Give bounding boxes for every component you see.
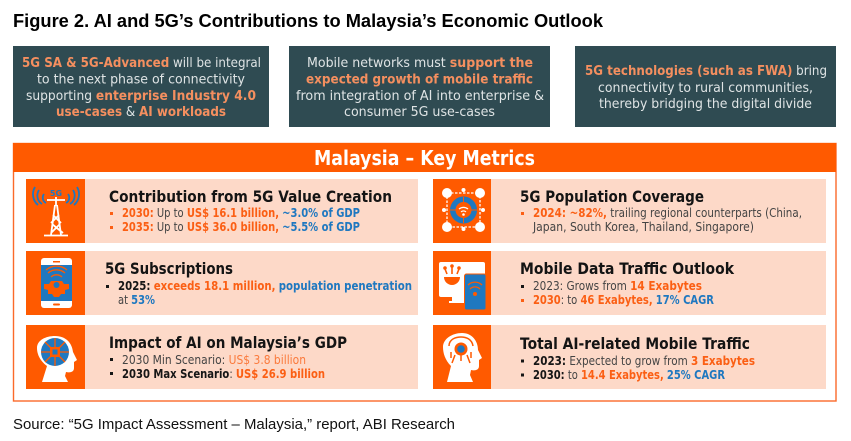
metric lines: 2023: Expected to grow from 3 Exabytes [533, 353, 755, 368]
card heading: Mobile Data Traffic Outlook [520, 259, 734, 278]
card: 5G subscriptions [26, 251, 418, 315]
metric lines [521, 353, 755, 382]
panel heading: Malaysia – Key Metrics [314, 146, 535, 170]
card: mobile data traffic outlook [433, 251, 826, 315]
callout: 5G SA and enterprise use-cases [13, 46, 269, 127]
metric lines: Japan, South Korea, Thailand, Singapore) [532, 219, 754, 234]
card heading: Contribution from 5G Value Creation [109, 187, 392, 206]
callout: mobile traffic growth: Mobile networks must support the [307, 55, 533, 71]
callout: rural connectivity: connectivity to rural communities, [598, 80, 813, 96]
metric lines: 2030: Up to US$ 16.1 billion, ~3.0% of GDP [122, 205, 360, 220]
card: contribution from 5G value creation [26, 179, 418, 243]
card: 5G population coverage [433, 179, 826, 243]
metric lines: 2030 Min Scenario: US$ 3.8 billion [122, 352, 306, 367]
icon: cell tower: 5G [50, 189, 62, 198]
metric lines: 2025: exceeds 18.1 million, population penetration [118, 278, 412, 293]
icon: connected globe [442, 188, 485, 232]
metric lines [110, 205, 360, 234]
metric lines: 2030 Max Scenario: US$ 26.9 billion [122, 366, 325, 381]
callout: mobile traffic growth: from integration of AI into enterprise & [296, 88, 544, 104]
source note: Source: “5G Impact Assessment – Malaysia,” report, ABI Research [13, 417, 455, 433]
panel: Malaysia key metrics [13, 143, 836, 401]
metric lines [106, 278, 412, 307]
callout: rural connectivity: 5G technologies (such as FWA) bring [585, 63, 827, 79]
callout: rural connectivity: thereby bridging the digital divide [599, 96, 812, 112]
metric lines: 2030: to 14.4 Exabytes, 25% CAGR [533, 367, 725, 382]
callout: 5G SA and enterprise use-cases: use-cases & AI workloads [56, 104, 226, 120]
metric lines: at 53% [118, 292, 155, 307]
icon: head with brain chip [37, 336, 77, 382]
metric lines: 2030: to 46 Exabytes, 17% CAGR [533, 292, 714, 307]
card: impact of AI on GDP [26, 325, 418, 389]
icon: phone with gear [41, 258, 72, 308]
icon: monitor and phone [439, 262, 486, 310]
callout: 5G SA and enterprise use-cases: to the next phase of connectivity [37, 72, 245, 88]
callout: 5G SA and enterprise use-cases: 5G SA & 5G-Advanced will be integral [22, 55, 261, 71]
callout: rural connectivity [575, 46, 836, 127]
card heading: 5G Subscriptions [105, 259, 233, 278]
icon: head with network [443, 333, 482, 382]
card heading: Total AI-related Mobile Traffic [520, 334, 750, 353]
metric lines: 2024: ~82%, trailing regional counterparts (China, [533, 205, 802, 220]
metric lines: 2023: Grows from 14 Exabytes [533, 278, 702, 293]
card heading: 5G Population Coverage [520, 187, 704, 206]
callout: mobile traffic growth: consumer 5G use-cases [344, 104, 495, 120]
callout: 5G SA and enterprise use-cases: supporting enterprise Industry 4.0 [26, 88, 256, 104]
metric lines [521, 278, 714, 307]
callout: mobile traffic growth [289, 46, 550, 127]
metric lines [110, 352, 325, 381]
metric lines [521, 205, 802, 234]
title: Figure 2. AI and 5G’s Contributions to Malaysia’s Economic Outlook [13, 11, 604, 31]
icon: cell tower [33, 187, 79, 236]
metric lines: 2035: Up to US$ 36.0 billion, ~5.5% of GDP [122, 219, 360, 234]
card: total AI-related mobile traffic [433, 325, 826, 389]
card heading: Impact of AI on Malaysia’s GDP [109, 333, 347, 352]
callout: mobile traffic growth: expected growth of mobile traffic [306, 72, 533, 88]
